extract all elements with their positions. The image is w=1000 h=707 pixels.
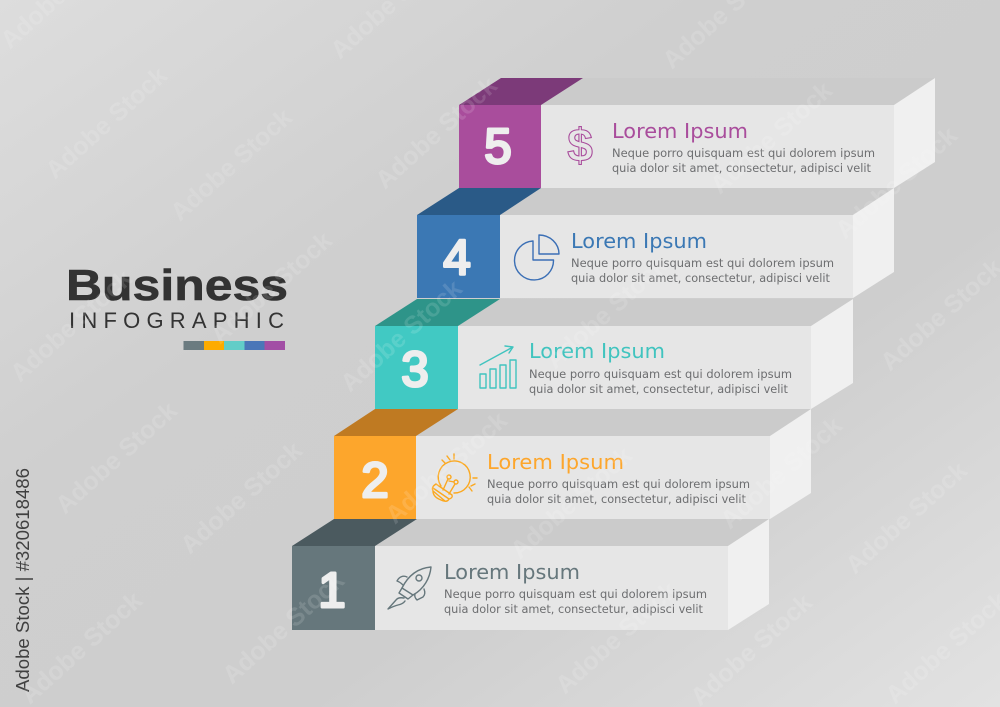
watermarks: Adobe Stock bbox=[15, 586, 148, 707]
step 3 body bbox=[529, 368, 792, 396]
watermarks: Adobe Stock bbox=[40, 61, 173, 184]
watermarks: Adobe Stock bbox=[715, 411, 848, 534]
colour legend bar bbox=[184, 341, 285, 350]
step 1 bbox=[292, 519, 769, 630]
number 3: 3 bbox=[401, 343, 429, 397]
step 4 bbox=[417, 188, 894, 298]
watermarks: Adobe Stock bbox=[380, 406, 513, 529]
watermarks: Adobe Stock bbox=[840, 456, 973, 579]
step 5 heading: Lorem Ipsum bbox=[612, 119, 748, 143]
watermarks: Adobe Stock bbox=[5, 264, 138, 387]
step 3 heading: Lorem Ipsum bbox=[529, 339, 665, 363]
title block bbox=[66, 261, 288, 350]
step 5 body: quia dolor sit amet, consectetur, adipisci velit bbox=[612, 162, 872, 175]
watermarks: Adobe Stock bbox=[705, 76, 838, 199]
step 1 body bbox=[444, 588, 707, 616]
number 1: 1 bbox=[318, 564, 346, 618]
step 4 body bbox=[571, 257, 834, 285]
vertical stock id: Adobe Stock | #320618486 bbox=[12, 468, 33, 692]
step 5 body: Neque porro quisquam est qui dolorem ipsum bbox=[612, 147, 875, 160]
step 2 bbox=[334, 409, 811, 519]
step 4 body: quia dolor sit amet, consectetur, adipisci velit bbox=[571, 272, 831, 285]
step 1 heading: Lorem Ipsum bbox=[444, 560, 580, 584]
step 4 body: Neque porro quisquam est qui dolorem ipsum bbox=[571, 257, 834, 270]
watermarks: Adobe Stock bbox=[505, 441, 638, 564]
step 4 heading: Lorem Ipsum bbox=[571, 229, 707, 253]
step 3 bbox=[375, 299, 853, 409]
watermarks: Adobe Stock bbox=[50, 396, 183, 519]
icon: light bulb bbox=[432, 454, 477, 501]
step 2 body: quia dolor sit amet, consectetur, adipisci velit bbox=[487, 493, 747, 506]
watermarks: Adobe Stock bbox=[335, 274, 468, 397]
icon: pie chart bbox=[515, 235, 559, 280]
step 2 body: Neque porro quisquam est qui dolorem ipsum bbox=[487, 478, 750, 491]
heading: Business: Business bbox=[66, 261, 288, 310]
step 5 bbox=[459, 78, 935, 188]
watermarks: Adobe Stock bbox=[830, 121, 963, 244]
step 2 heading: Lorem Ipsum bbox=[487, 450, 624, 474]
icon: growth chart bbox=[480, 346, 516, 388]
icon: rocket bbox=[388, 567, 431, 609]
watermarks: Adobe Stock bbox=[175, 436, 308, 559]
watermarks: Adobe Stock bbox=[165, 103, 298, 226]
step 1 body: Neque porro quisquam est qui dolorem ipsum bbox=[444, 588, 707, 601]
icon: dollar sign: $ bbox=[567, 119, 593, 171]
number 2: 2 bbox=[361, 454, 389, 508]
watermarks: Adobe Stock bbox=[550, 576, 683, 699]
step 1 body: quia dolor sit amet, consectetur, adipisci velit bbox=[444, 603, 704, 616]
watermarks: Adobe Stock bbox=[540, 251, 673, 374]
subheading: INFOGRAPHIC: INFOGRAPHIC bbox=[69, 308, 284, 333]
number 4: 4 bbox=[443, 231, 471, 285]
step 3 body: Neque porro quisquam est qui dolorem ipsum bbox=[529, 368, 792, 381]
watermarks: Adobe Stock bbox=[205, 226, 338, 349]
step 2 body bbox=[487, 478, 750, 506]
step 3 body: quia dolor sit amet, consectetur, adipisci velit bbox=[529, 383, 789, 396]
number 5: 5 bbox=[484, 120, 512, 174]
step 5 body bbox=[612, 147, 875, 175]
watermarks: Adobe Stock bbox=[370, 71, 503, 194]
watermarks: Adobe Stock bbox=[217, 566, 350, 689]
